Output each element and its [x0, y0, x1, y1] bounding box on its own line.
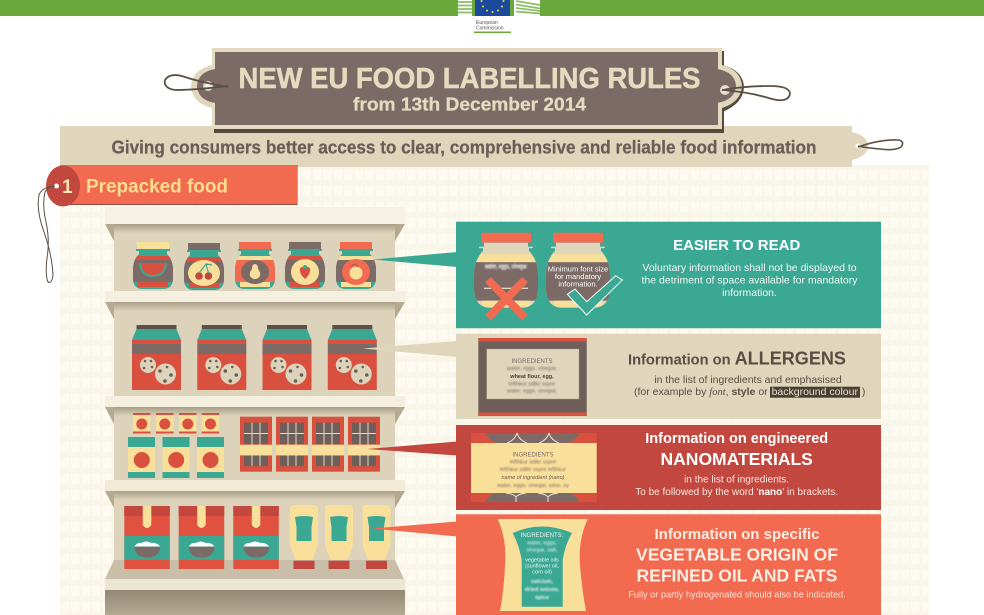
- oil bottle 3: [362, 505, 390, 569]
- vegetable oil bottle label: corn oil): [532, 570, 552, 576]
- title banner: [165, 48, 790, 133]
- allergen ingredients label: [478, 338, 587, 416]
- pointer: packs to nanomaterials: [367, 442, 457, 456]
- nano ingredients label: lefthkur sdtkr sspre: [510, 460, 556, 466]
- section heading: prepacked food: 1: [62, 177, 73, 198]
- vegetable oil bottle label: vegetable oils: [525, 558, 559, 564]
- panel: nanomaterials: [456, 425, 881, 510]
- small tomato cans: [133, 413, 219, 434]
- vegetable oil bottle label: [498, 519, 588, 611]
- vegetable oil bottle label: vinegar, salt,: [527, 548, 558, 554]
- section heading: prepacked food: [38, 165, 297, 282]
- patterned background: [60, 165, 929, 615]
- body text: (for example by font, style or background colour ): [634, 386, 865, 398]
- vegetable oil bottle label: (sunflower oil,: [525, 564, 559, 570]
- shelf 4: cereal boxes and oil bottles: [124, 505, 391, 569]
- biscuit box 4: [328, 325, 377, 390]
- pack 2: [276, 417, 308, 472]
- hanging string: [38, 186, 55, 282]
- right string: [722, 86, 790, 100]
- pointer: biscuits to allergens: [363, 341, 457, 357]
- European Commission logo: [458, 0, 540, 33]
- European Commission logo: European: [476, 20, 498, 26]
- biscuit box 3: [262, 325, 312, 390]
- jar: watermelon: [132, 242, 174, 290]
- icon: good jar: information.: [558, 280, 598, 289]
- shelf 1: jam jars: [132, 242, 377, 291]
- pack 3: [312, 417, 344, 472]
- left string: [165, 75, 228, 90]
- icon: good jar: Minimum font size: [548, 265, 608, 274]
- European Commission logo: Commission: [476, 26, 504, 32]
- oil bottle 1: [290, 505, 318, 569]
- subtitle band: [60, 126, 903, 167]
- body text: To be followed by the word 'nano' in brackets.: [635, 487, 838, 498]
- heading: Information on ALLERGENS: [628, 348, 846, 368]
- icon: bad jar: [473, 233, 539, 318]
- heading emphasis: NANOMATERIALS: [661, 449, 813, 469]
- heading: Information on engineered: [645, 431, 828, 447]
- icon: red cross: [488, 280, 525, 318]
- nano ingredients label: water, eggs, vinegar, wine, sy: [496, 483, 569, 489]
- pack 1: [240, 417, 272, 472]
- date text: from 13th December 2014: [353, 94, 587, 114]
- large tomato cans: [128, 437, 224, 478]
- shelf 2: biscuit boxes: [132, 325, 377, 390]
- heading emphasis: VEGETABLE ORIGIN OF: [636, 545, 838, 565]
- allergen ingredients label: wheat flour, egg,: [509, 374, 554, 380]
- allergen ingredients label: water, eggs, vinegar,: [506, 388, 558, 394]
- biscuit box 2: [197, 325, 246, 390]
- allergen ingredients label: lefthkur sdtkr sspre: [509, 382, 555, 388]
- panel: easier to read: [456, 222, 881, 328]
- nano ingredients label: INGREDIENTS: [512, 453, 554, 459]
- allergen ingredients label: INGREDIENTS: [511, 359, 553, 365]
- nano ingredients label: name of ingredient (nano): [502, 475, 565, 481]
- cereal box 1: [124, 506, 170, 569]
- icon: check mark: [567, 276, 622, 315]
- pointer: jars to easier to read: [373, 252, 457, 267]
- section heading: prepacked food: Prepacked food: [86, 176, 228, 198]
- vegetable oil bottle label: INGREDIENTS:: [521, 533, 564, 539]
- allergen ingredients label: water, eggs, vinegar,: [506, 366, 558, 372]
- shelf 3: tomato cans and packs: [128, 413, 380, 478]
- shelving unit: [105, 207, 405, 615]
- cereal box 2: [179, 506, 224, 569]
- panel: vegetable oils: [456, 514, 881, 615]
- body text: [634, 374, 865, 398]
- pointer: bottle to vegetable oils: [372, 522, 457, 536]
- heading emphasis: [636, 545, 838, 586]
- jar: strawberry: [284, 242, 326, 290]
- vegetable oil bottle label: dried onions,: [525, 587, 560, 593]
- nano ingredients label: [471, 433, 597, 502]
- body text: in the list of ingredients and emphasised: [654, 374, 842, 386]
- title text: NEW EU FOOD LABELLING RULES: [238, 63, 700, 95]
- icon: good jar: for mandatory: [555, 272, 601, 281]
- heading emphasis: REFINED OIL AND FATS: [637, 566, 837, 586]
- nano ingredients label: lefthkur sdtkr sspre lefthkur: [500, 467, 566, 473]
- body text: the detriment of space available for mandatory: [642, 274, 858, 286]
- vegetable oil bottle label: spice: [535, 595, 549, 601]
- heading: Information on specific: [654, 526, 820, 543]
- body text: Voluntary information shall not be displayed to: [642, 262, 857, 274]
- jar: pear: [234, 242, 276, 290]
- heading: EASIER TO READ: [673, 237, 800, 254]
- body text: [635, 475, 838, 498]
- body text: Fully or partly hydrogenated should also be indicated.: [628, 590, 846, 600]
- body text: [642, 262, 858, 299]
- vegetable oil bottle label: water, eggs,: [526, 540, 557, 546]
- icon: bad jar: water, eggs, vinegar: [484, 264, 527, 271]
- biscuit box 1: [132, 325, 181, 390]
- icon: good jar: [545, 233, 611, 313]
- pack 4: [348, 417, 380, 472]
- vegetable oil bottle label: calcium,: [531, 579, 553, 585]
- jar: cherries: [183, 243, 225, 291]
- jar: peach: [335, 242, 377, 290]
- body text: information.: [722, 287, 777, 299]
- panel: allergens: [456, 334, 881, 419]
- cereal box 3: [233, 506, 279, 569]
- body text: in the list of ingredients.: [684, 475, 789, 486]
- oil bottle 2: [325, 505, 353, 569]
- green header bar: [0, 0, 984, 16]
- subtitle text: Giving consumers better access to clear, comprehensive and reliable food information: [112, 136, 816, 158]
